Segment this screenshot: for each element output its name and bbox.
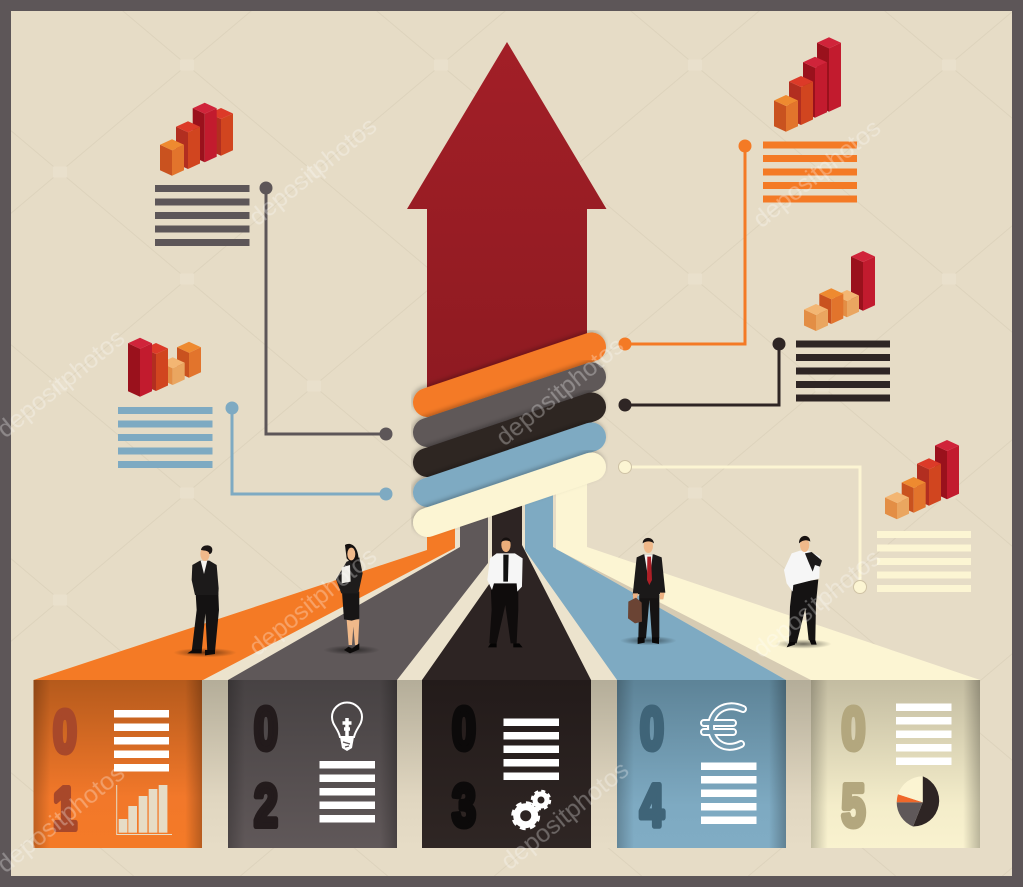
3d bars: right — [804, 251, 875, 331]
number 01: 0 — [53, 698, 77, 765]
person: man with jacket over shoulder — [775, 536, 832, 649]
number 02 — [254, 695, 278, 839]
number 03: 0 — [452, 695, 476, 762]
connector: black — [618, 338, 786, 412]
band: blue — [428, 437, 592, 492]
lines — [114, 710, 169, 772]
icon: light bulb — [332, 702, 362, 751]
icon: gears — [514, 792, 550, 828]
panel 01 — [34, 680, 202, 848]
watermark text: depositphotos — [748, 544, 886, 664]
text lines: orange — [763, 142, 857, 202]
number 05: 0 — [842, 695, 865, 762]
number 04: 0 — [640, 695, 664, 762]
band: orange — [428, 347, 592, 402]
3d bars: left — [128, 338, 201, 397]
twisted bands — [428, 347, 592, 522]
icon: pie chart — [897, 776, 939, 827]
lines — [504, 718, 559, 780]
connector: orange — [618, 140, 752, 350]
ribbon: cream — [556, 480, 980, 680]
connector: blue — [226, 402, 392, 500]
ribbon: blue — [525, 490, 786, 680]
3d bars: lower right — [885, 440, 959, 519]
watermark text: depositphotos — [244, 542, 382, 662]
person: woman arms crossed — [173, 545, 237, 657]
number 01: 1 — [53, 775, 77, 842]
lines — [701, 762, 756, 824]
3d bars: top right — [774, 37, 841, 132]
connector: cream — [618, 460, 866, 594]
number 05: 5 — [842, 772, 865, 839]
watermark text: depositphotos — [496, 756, 634, 876]
lines — [320, 761, 375, 822]
person: man with briefcase — [620, 538, 677, 645]
watermark text — [0, 112, 886, 879]
band: gray — [428, 377, 592, 432]
3d bars: top left — [160, 103, 233, 176]
watermark text: depositphotos — [491, 332, 629, 452]
band: cream — [428, 467, 592, 522]
text lines: cream — [877, 531, 971, 592]
person: woman with papers — [323, 544, 380, 655]
ribbons to panels — [33, 480, 980, 680]
panel gaps shading — [202, 680, 811, 848]
number 04 — [640, 695, 664, 839]
panel 05 — [811, 680, 980, 848]
panel 04 — [617, 680, 786, 848]
ribbon: gray — [228, 500, 488, 680]
number 01 — [53, 698, 77, 842]
panel 03 — [422, 680, 591, 848]
lines — [896, 704, 952, 765]
number 03: 3 — [452, 772, 476, 839]
number 04: 4 — [640, 772, 664, 839]
watermark text: depositphotos — [244, 112, 382, 232]
text lines: gray — [155, 185, 250, 246]
text lines: black — [796, 340, 890, 402]
icon: euro — [704, 706, 743, 747]
icon: bar chart — [117, 785, 172, 834]
ribbon shade gap — [553, 547, 811, 680]
ribbon: black — [422, 500, 591, 680]
ribbon: orange — [34, 510, 455, 680]
number 02: 2 — [254, 772, 278, 839]
number 03 — [452, 695, 476, 839]
band: black — [428, 407, 592, 462]
panel 02 — [228, 680, 397, 848]
connector: gray — [260, 182, 392, 440]
ribbon gaps — [33, 530, 980, 680]
number 05 — [842, 695, 865, 839]
watermark text: depositphotos — [748, 114, 886, 234]
text lines: blue — [118, 407, 212, 468]
person: man in white shirt — [487, 537, 523, 647]
arrow — [407, 42, 606, 403]
number 02: 0 — [254, 695, 278, 762]
